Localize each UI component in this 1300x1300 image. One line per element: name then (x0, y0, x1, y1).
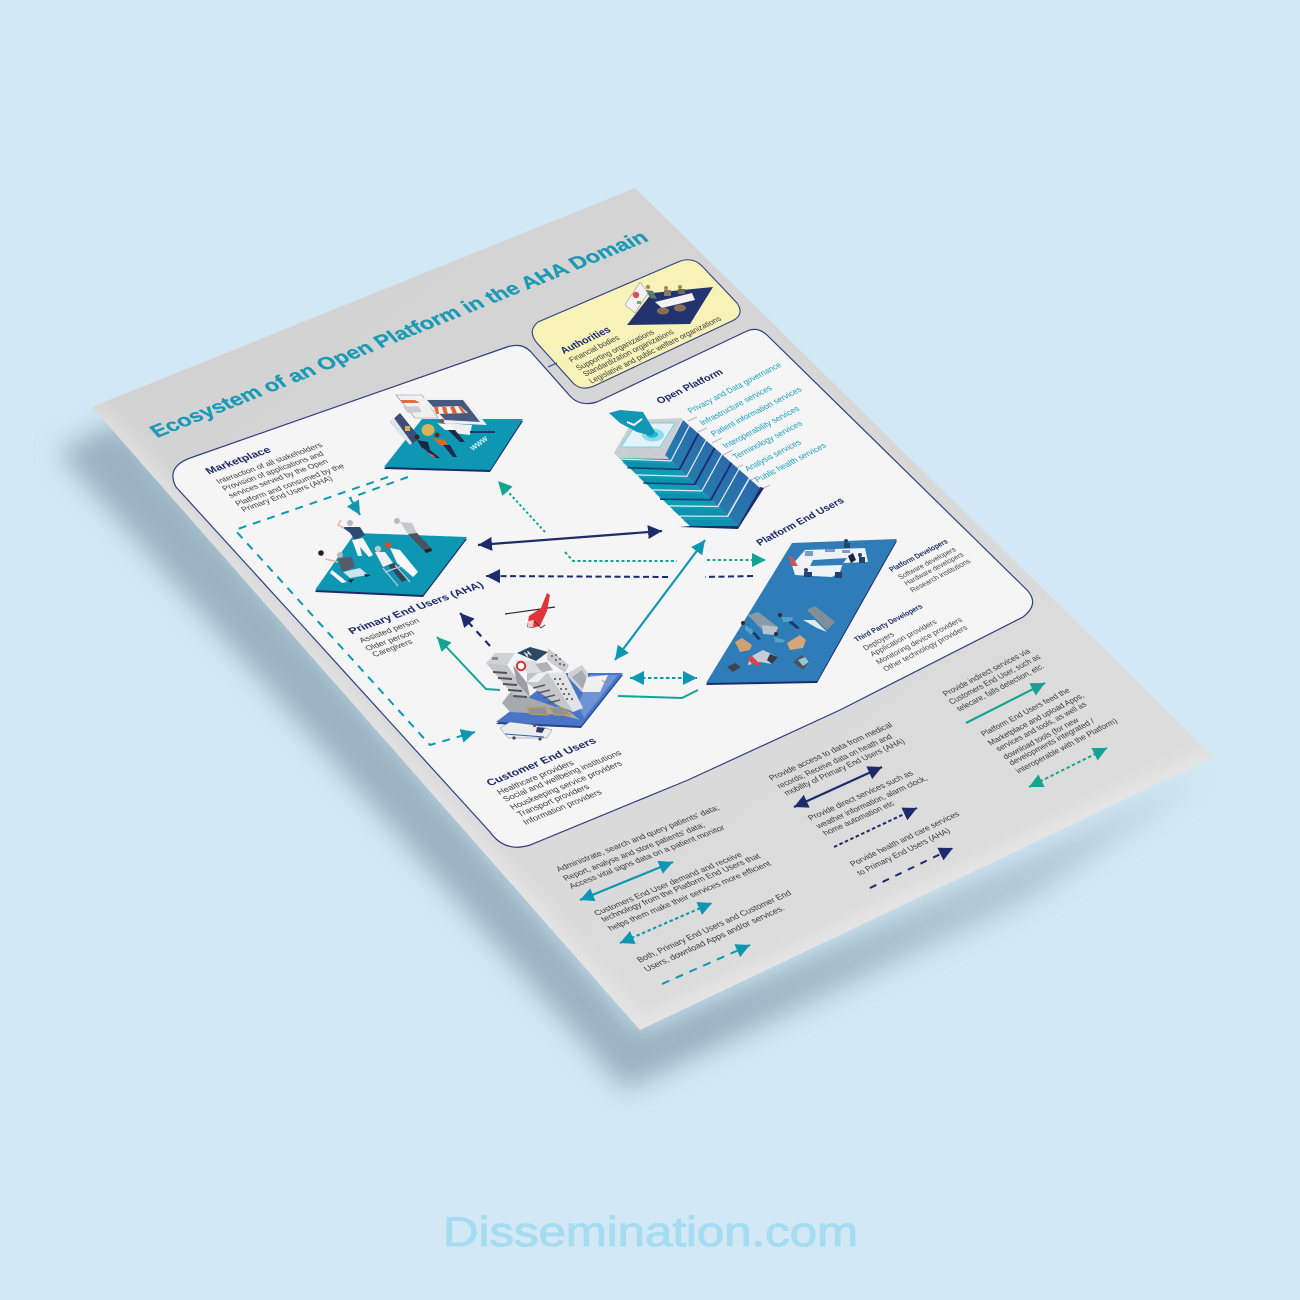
panel: authorities (532, 260, 740, 388)
marketplace group (204, 395, 523, 513)
illustration: marketplace platform: WWW (470, 436, 490, 453)
list: authorities: Legislative and public welfare organizations (587, 315, 723, 385)
arrow: customers to platform users dotted (630, 677, 697, 679)
list: customer end users: Transport providers (514, 782, 591, 818)
list: platform services (685, 360, 828, 484)
person with walker (375, 546, 381, 552)
watermark: Dissemination.com (443, 1208, 858, 1255)
arrow: marketplace to customers dashed (235, 477, 475, 745)
list: platform services: Analysis services (742, 437, 803, 473)
platform end users group (706, 496, 973, 685)
connector tick between panels (548, 363, 557, 367)
list: primary end users: Assisted person (357, 617, 422, 644)
legend item: indirect services: Provide indirect services via (940, 646, 1032, 698)
list: platform services: Interoperability services (720, 404, 801, 450)
list: primary end users: Caregivers (370, 638, 415, 658)
legend item: access data: Provide access to data from medical (766, 720, 894, 782)
heading: platform end users: Platform End Users (754, 496, 847, 548)
arrow: dotted head to platform users (707, 559, 766, 561)
list: platform developers: Software developers (896, 545, 958, 581)
legend item: platform users feed: download tools (for new (1001, 716, 1081, 761)
text: marketplace description: Interaction of all stakeholders (214, 441, 325, 485)
legend item: platform users feed (979, 686, 1120, 787)
nurse (385, 542, 391, 548)
arrow: open platform to customers solid (615, 540, 705, 660)
list: authorities: Financial bodies (567, 334, 622, 364)
list: third party developers: Other technology providers (881, 623, 970, 673)
list: primary end users: Older person (363, 629, 417, 652)
list: authorities: Supporting organizations (574, 328, 656, 372)
list: platform developers: Hardware developers (902, 550, 966, 587)
arrow: marketplace feed dotted (498, 481, 545, 532)
text: marketplace description (214, 441, 347, 513)
legend (554, 646, 1120, 984)
legend item: customers demand: Customers End User demand and receive (591, 850, 745, 917)
list: customer end users: Healthcare providers (494, 758, 576, 796)
illustration: hospital: H (522, 650, 534, 659)
legend item: platform users feed: services and tools, as well as (994, 700, 1089, 753)
heading: authorities: Authorities (559, 325, 614, 356)
central block (515, 660, 547, 673)
list: platform services: Terminology services (730, 419, 804, 461)
heading: third party developers: Third Party Developers (852, 602, 925, 644)
legend item: direct services: Provide direct services such as (805, 768, 915, 822)
illustration: service tower (609, 410, 770, 529)
legend item: indirect services (940, 646, 1046, 723)
customer end users group (485, 593, 624, 826)
legend item: platform users feed: Marketplace and upload Apps, (986, 691, 1086, 747)
list: third party developers: Application providers (868, 618, 939, 658)
legend item: direct services (805, 768, 929, 847)
heading: primary end users: Primary End Users (AHA) (347, 581, 487, 637)
tower white stripes (620, 426, 749, 516)
legend item: both download: Users, download Apps and/or services. (641, 903, 787, 973)
legend item: direct services: weather information, alarm clock, (813, 774, 929, 831)
heading: marketplace: Marketplace (204, 446, 274, 477)
legend item: administrate: Administrate, search and query patients' data; (554, 803, 721, 873)
workstations (748, 612, 778, 633)
title: Ecosystem of an Open Platform in the AHA Domain (146, 228, 653, 442)
heading: open platform: Open Platform (655, 367, 726, 406)
meeting table (792, 548, 868, 577)
tower navy stripes (628, 434, 732, 500)
illustration: marketplace platform (384, 395, 523, 472)
legend item: both download: Both, Primary End Users and Customer End (634, 888, 794, 964)
legend item: platform users feed: Platform End Users feed the (979, 686, 1072, 738)
icon: shield (609, 410, 655, 436)
podium (502, 690, 580, 720)
person exercising (347, 520, 353, 526)
list: third party developers: Monitoring device providers (874, 616, 964, 666)
list: platform services: Infrastructure services (697, 383, 774, 427)
ambulance (500, 722, 552, 738)
legend item: customers demand (591, 850, 774, 943)
arrow: open platform to primary users solid (478, 531, 662, 545)
illustration: primary users platform (315, 518, 467, 597)
list: customer end users: Information providers (520, 787, 604, 826)
tower shading bands (622, 462, 738, 526)
front block (527, 673, 573, 712)
list: customer end users: Houskeeping service providers (507, 759, 624, 811)
illustration: hospital (486, 647, 623, 741)
person standing (394, 518, 400, 524)
list: primary end users (357, 617, 422, 658)
legend item: administrate: Access vital signs data on a patient monitor (567, 823, 727, 890)
list: platform services: Public health services (752, 441, 828, 484)
arrow: customers to primary users solid (437, 637, 500, 690)
seated person (318, 550, 324, 556)
heading: platform developers: Platform Developers (887, 537, 950, 574)
legend item: platform users feed: developments integrated / (1007, 717, 1097, 767)
legend item: administrate: Report, analyse and store patients' data; (561, 820, 707, 882)
poster shadow (58, 420, 1210, 1090)
arrow: marketplace to primary users dashed (350, 477, 408, 515)
poster sheet (92, 188, 1214, 1030)
text: marketplace description: Primary End Users (AHA) (239, 474, 335, 513)
legend item: health and care: to Primary End Users (AHA) (854, 826, 952, 877)
icon: helicopter (505, 593, 555, 628)
arrows: ecosystem connections (235, 477, 766, 745)
list: customer end users (494, 748, 624, 826)
legend item: access data (766, 720, 907, 807)
list: platform services: Patient information services (708, 385, 804, 438)
heading: customer end users: Customer End Users (485, 736, 599, 788)
annex (568, 665, 588, 692)
list: customer end users: Social and wellbeing institutions (500, 748, 624, 803)
primary end users group (315, 518, 487, 658)
legend item: indirect services: Customers End User, such as (946, 652, 1043, 706)
legend item: health and care: Porvide health and care services (847, 809, 961, 868)
legend item: customers demand: helps them make their services more efficient (605, 859, 774, 932)
open platform group (609, 360, 828, 529)
arrow: platform users to primary users dashed (486, 576, 753, 577)
legend item: administrate (554, 803, 727, 900)
list: platform services: Privacy and Data governance (685, 360, 784, 415)
panel: main ecosystem (173, 329, 1033, 847)
arrow: customers to primary users dashed (460, 613, 490, 646)
arrow: platform users dotted link (565, 552, 677, 561)
legend item: access data: records; Receive data on heath and (774, 732, 894, 790)
text: marketplace description: services served by the Open (226, 457, 330, 499)
list: platform developers: Research institutions (908, 557, 973, 594)
left tower (486, 663, 530, 697)
legend item: direct services: home automation etc (820, 799, 896, 837)
list: authorities: Standardization organizations (581, 328, 676, 378)
legend item: customers demand: technology from the Platform End Users that (598, 851, 763, 923)
arrow: customers to platform users solid (618, 690, 698, 698)
legend item: platform users feed: interoperable with the Platform) (1014, 717, 1120, 775)
illustration: developers platform (706, 539, 897, 685)
legend item: access data: mobility of Primary End Users (AHA) (781, 736, 907, 797)
list: third party developers: Deployers (861, 630, 896, 652)
illustration: meeting room (625, 282, 713, 325)
legend item: indirect services: telecare, falls detection, etc. (954, 661, 1046, 713)
text: marketplace description: Platform and consumed by the (233, 462, 347, 507)
text: marketplace description: Provision of applications and (220, 450, 326, 492)
